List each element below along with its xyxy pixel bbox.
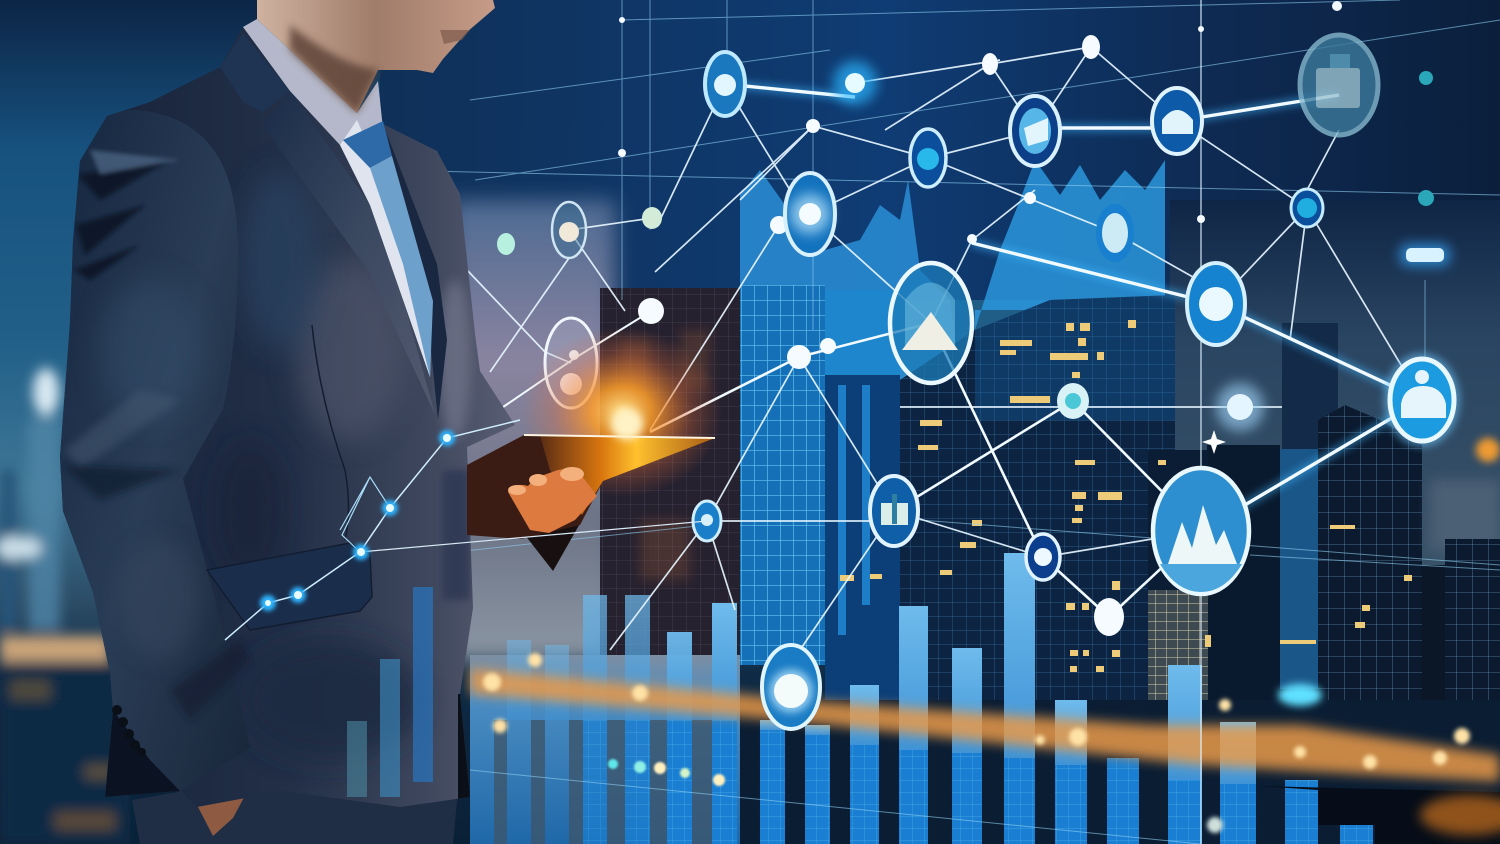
building: blue side tower xyxy=(1280,449,1320,689)
lower saturated bar sections xyxy=(583,720,1373,844)
cyan river lights xyxy=(608,759,725,786)
man: neck and chin xyxy=(257,0,495,113)
node: bottom glow xyxy=(762,645,820,729)
building: blue glass tower xyxy=(740,285,825,665)
buildings xyxy=(600,285,1500,749)
building: far blur xyxy=(1430,480,1500,550)
node: mountain large xyxy=(890,263,972,383)
blurred city lights at far left xyxy=(0,368,130,844)
node: dome glass xyxy=(1096,204,1134,262)
horizon light streak xyxy=(470,653,1500,833)
node: document ring center xyxy=(870,476,918,546)
node: small chart ring xyxy=(693,501,721,541)
node: faded top right xyxy=(1300,35,1378,135)
node: lower ring xyxy=(1026,534,1060,580)
building: upper blue block xyxy=(825,290,900,375)
hand xyxy=(508,467,597,533)
lower waterfront base xyxy=(470,655,1500,844)
network: glow under bright lines xyxy=(725,84,1422,531)
right lapel xyxy=(383,124,447,420)
far right orange light xyxy=(1476,438,1500,462)
bar chart overlay xyxy=(507,553,1373,844)
bright flare xyxy=(611,408,643,440)
lit windows xyxy=(840,320,1412,672)
node: dome icon xyxy=(1152,88,1202,154)
building: slim dark tower xyxy=(1282,323,1338,450)
man: trousers xyxy=(132,785,458,844)
building: wide lit tower xyxy=(900,295,1175,740)
node: document icon xyxy=(1010,96,1060,166)
network: solid vertical line xyxy=(1200,0,1202,844)
node: glowing bar xyxy=(1400,244,1450,266)
tablet with orange glow xyxy=(467,327,722,571)
network: bright thick lines xyxy=(440,84,1422,617)
tablet flap xyxy=(521,520,582,571)
building: right grid tower xyxy=(1318,405,1422,735)
sleeve xyxy=(60,110,250,797)
tablet rim xyxy=(524,435,715,438)
node: bright ring right xyxy=(1187,263,1245,345)
node: teal small xyxy=(1057,383,1089,419)
pocket flap xyxy=(207,543,372,630)
node: large glow ring xyxy=(785,173,835,255)
star sparkle xyxy=(1202,430,1226,454)
node: cyan right xyxy=(1291,189,1323,227)
node: cyan ring xyxy=(910,129,946,187)
small white dots xyxy=(497,1,1342,636)
building: stripe accents xyxy=(838,385,870,635)
node: left ring xyxy=(552,202,586,258)
node: top glow xyxy=(833,61,877,105)
node: user icon xyxy=(1384,353,1460,447)
network: connecting lines xyxy=(467,47,1422,650)
tablet glowing face xyxy=(540,436,715,515)
upper pale bar sections xyxy=(507,553,1256,784)
node: top ring xyxy=(705,52,745,116)
left lapel xyxy=(263,91,435,414)
jacket shading xyxy=(215,170,473,799)
skyline chart silhouette behind buildings xyxy=(740,160,1165,380)
building: far right tower xyxy=(1445,539,1500,749)
node: large mountain chart xyxy=(1153,468,1249,594)
bars over suit xyxy=(347,587,433,797)
building: narrow navy tower xyxy=(825,375,900,725)
man: shirt and tie xyxy=(243,19,433,377)
node: tablet ring xyxy=(545,318,597,408)
tablet body xyxy=(467,435,715,539)
network: thin grid lines xyxy=(380,0,1500,844)
building: dark tower left xyxy=(600,288,740,688)
rising chart line on suit xyxy=(225,420,707,640)
tie xyxy=(343,121,392,168)
warm tower glow xyxy=(620,330,710,580)
shirt xyxy=(243,19,432,377)
node: far right small dots xyxy=(1418,71,1434,206)
seam xyxy=(312,325,348,540)
jacket body xyxy=(60,27,515,807)
sleeve folds xyxy=(62,150,250,797)
sleeve buttons xyxy=(112,705,146,756)
pale haze beside the man xyxy=(450,200,615,660)
building: cream grid tower xyxy=(1148,590,1208,730)
network nodes xyxy=(497,1,1460,729)
water and reflection xyxy=(1260,786,1500,844)
cyan glow spot xyxy=(1278,684,1322,706)
node: glow mid right xyxy=(1216,383,1264,431)
man: suit jacket xyxy=(60,27,515,807)
collar band of lapel xyxy=(220,33,290,112)
man: hand in pocket xyxy=(180,751,250,836)
building: dark tower right of center xyxy=(1207,445,1280,730)
